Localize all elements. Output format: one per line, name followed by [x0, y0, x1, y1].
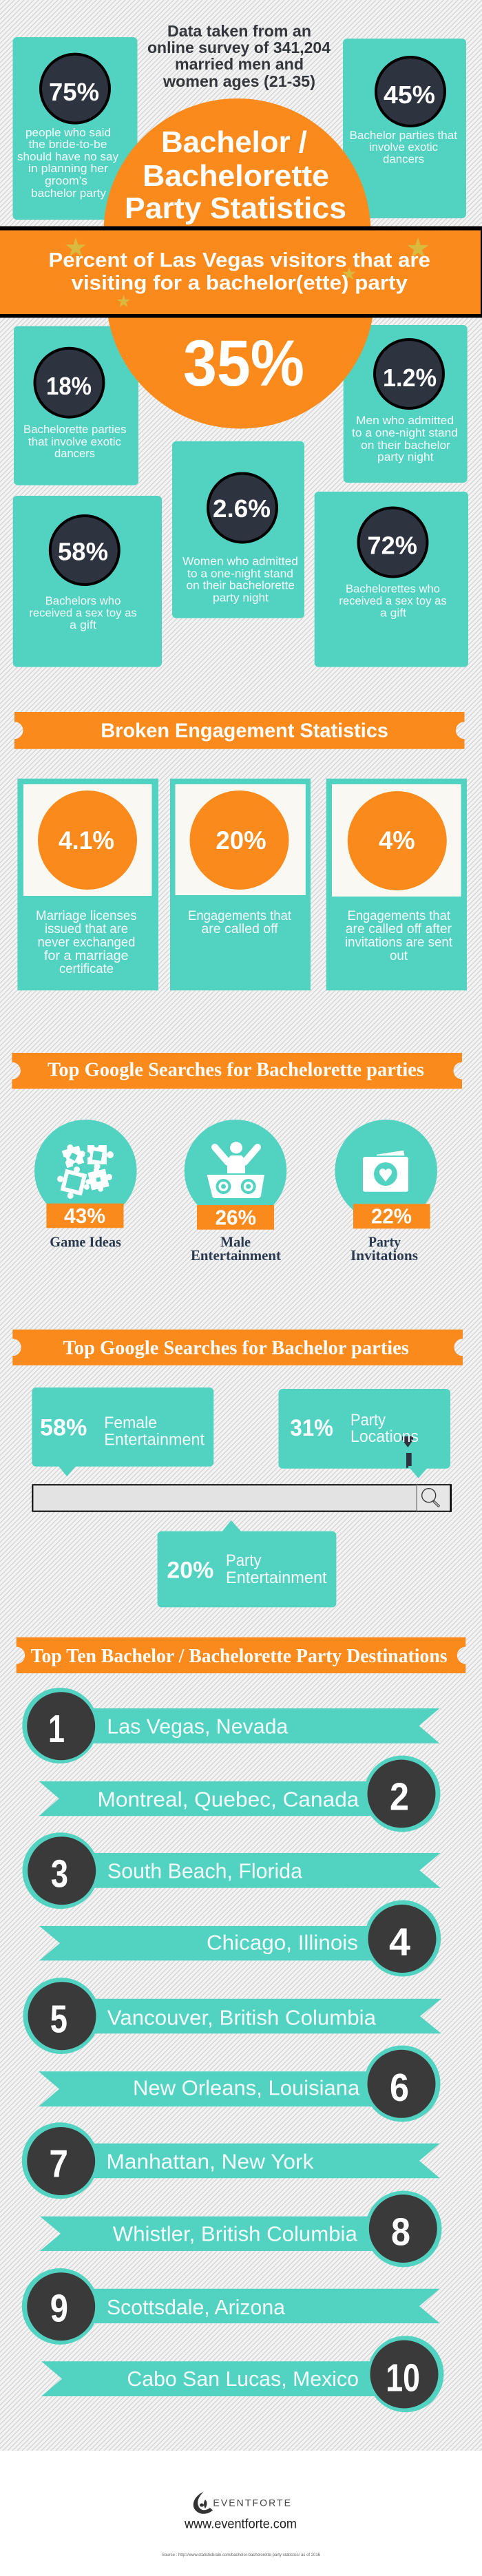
callout: party locations — [278, 1389, 450, 1478]
heading: bachelor searches: Top Google Searches for Bachelor parties — [63, 1337, 409, 1359]
intro text: married men and — [175, 55, 304, 73]
icon: eventforte mark — [193, 2491, 213, 2514]
panel: 4.1% marriage licenses: for a marriage — [44, 949, 129, 963]
search stat: game ideas: Game Ideas — [50, 1234, 121, 1250]
star — [407, 237, 429, 258]
stat: 1.2%: to a one-night stand — [352, 427, 458, 439]
footer logo: EVENTFORTE — [213, 2497, 291, 2508]
panel: 72% stat card: received a sex toy as — [339, 595, 447, 607]
panel: 4% called off after invitations — [326, 779, 467, 990]
heading: top ten destinations: Top Ten Bachelor / Bachelorette Party Destinations — [31, 1645, 448, 1667]
ribbon 7: Manhattan — [22, 2122, 440, 2199]
panel: 2.6% stat card: to a one-night stand — [187, 568, 293, 580]
panel: 58% stat card — [13, 496, 162, 667]
panel: 2.6% stat card: Women who admitted — [182, 556, 298, 568]
callout: party entertainment: Party — [226, 1551, 262, 1570]
panel: 20% engagements called off: are called off — [201, 922, 278, 936]
panel: 58% stat card: a gift — [70, 619, 96, 631]
panel: 20% engagements called off: 20% — [216, 826, 266, 855]
panel: 4% called off after invitations: invitations are sent — [345, 936, 453, 950]
ribbon 2: Montreal: Montreal, Quebec, Canada — [98, 1787, 359, 1811]
panel: 72% stat card — [315, 492, 468, 667]
search stat: male entertainment: 26% — [215, 1206, 256, 1229]
heading: bachelorette searches: Top Google Searches for Bachelorette parties — [48, 1058, 424, 1080]
panel: 4.1% marriage licenses: Marriage licenses — [36, 909, 137, 923]
panel: 20% engagements called off — [170, 779, 311, 990]
ribbon 7: Manhattan: 7 — [49, 2142, 68, 2186]
ribbon 1: Las Vegas: Las Vegas, Nevada — [107, 1714, 289, 1738]
star — [342, 267, 356, 280]
search stat: male entertainment: Male — [220, 1234, 251, 1250]
banner text: visiting for a bachelor(ette) party — [72, 272, 408, 295]
panel: 2.6% stat card — [172, 441, 304, 618]
stat: 1.2%: party night — [377, 451, 434, 463]
heading: broken engagement statistics: Broken Engagement Statistics — [101, 720, 388, 742]
panel: 4% called off after invitations: 4% — [379, 826, 415, 855]
panel: 2.6% stat card: 2.6% — [213, 494, 271, 523]
title — [125, 125, 346, 225]
search stat: party invitations — [335, 1120, 437, 1264]
stat circle 45% — [376, 57, 445, 126]
panel: 45% stat card — [343, 39, 466, 218]
ribbon 9: Scottsdale: 9 — [50, 2287, 68, 2330]
big orange circle: 35 percent — [106, 160, 375, 428]
stat: 18%: that involve exotic — [28, 436, 121, 448]
ribbon 10: Cabo San Lucas — [41, 2336, 443, 2412]
panel: 4% called off after invitations: out — [390, 949, 408, 963]
icon: puzzle pieces — [53, 1141, 115, 1203]
callout: party entertainment: Entertainment — [226, 1569, 327, 1587]
ribbon 6: New Orleans — [39, 2045, 441, 2122]
banner text: Percent of Las Vegas visitors that are — [48, 249, 430, 271]
text: 45% stat: involve exotic — [369, 141, 438, 154]
search stat: male entertainment — [185, 1120, 286, 1264]
heading: bachelor searches — [12, 1330, 463, 1365]
heading: bachelorette searches — [12, 1053, 462, 1089]
search stat: party invitations: Invitations — [350, 1247, 418, 1264]
ribbon 9: Scottsdale: Scottsdale, Arizona — [107, 2295, 286, 2319]
callout: party locations: Party — [350, 1411, 386, 1430]
callout: female entertainment — [32, 1388, 213, 1476]
banner: percent of Las Vegas visitors — [0, 226, 482, 318]
panel: 4% called off after invitations: Engagements that — [347, 909, 451, 923]
panel: 4.1% marriage licenses: never exchanged — [37, 936, 135, 950]
panel: 4% called off after invitations: are called off after — [346, 922, 452, 936]
text: 45% stat: Bachelor parties that — [350, 129, 457, 142]
ribbon 5: Vancouver: 5 — [50, 1998, 67, 2041]
star — [65, 237, 86, 257]
ribbon 8: Whistler — [40, 2191, 442, 2267]
icon: map marker — [402, 1436, 413, 1468]
ribbon 4: Chicago: Chicago, Illinois — [207, 1931, 358, 1955]
search stat: game ideas: 43% — [64, 1204, 105, 1228]
ribbon 1: Las Vegas: 1 — [48, 1707, 65, 1750]
intro text: Data taken from an — [167, 22, 311, 40]
panel: 58% stat card: Bachelors who — [45, 595, 120, 607]
callout: female entertainment: Female — [104, 1414, 157, 1432]
panel: 2.6% stat card: party night — [213, 592, 269, 605]
heading: top ten destinations — [17, 1637, 465, 1673]
callout: female entertainment: Entertainment — [104, 1431, 205, 1449]
heading: broken engagement statistics — [14, 712, 464, 749]
callout: party entertainment — [158, 1520, 336, 1607]
ribbon 3: South Beach: South Beach, Florida — [107, 1859, 303, 1883]
ribbon 4: Chicago: 4 — [389, 1920, 411, 1963]
ribbon 3: South Beach — [22, 1832, 441, 1909]
panel: 1.2% stat card — [344, 325, 468, 483]
icon: man in speaker box — [207, 1142, 264, 1198]
stat: 1.2%: on their bachelor — [361, 439, 451, 452]
ribbon 2: Montreal: 2 — [390, 1774, 409, 1818]
source line: Source : http://www.statisticbrain.com/bachelor-bachelorette-party-statistics/ as of 2016 — [162, 2553, 320, 2557]
ribbon 5: Vancouver — [23, 1978, 441, 2054]
stat: 18%: dancers — [54, 448, 95, 460]
title: Bachelor / — [161, 125, 307, 159]
panel: 4.1% marriage licenses — [17, 779, 158, 990]
website address: www.eventforte.com — [184, 2517, 297, 2532]
text: 75% stat: bachelor party — [31, 187, 107, 200]
ribbon 9: Scottsdale — [22, 2268, 440, 2345]
ribbon 2: Montreal — [39, 1756, 440, 1832]
text: 75% stat: 75% — [49, 78, 99, 106]
text: 75% stat — [17, 78, 119, 200]
ribbon 10: Cabo San Lucas: Cabo San Lucas, Mexico — [127, 2367, 359, 2391]
text: 45% stat: dancers — [383, 153, 424, 165]
panel: 18% stat card — [14, 326, 138, 485]
stat value 45%: 45% — [384, 81, 435, 109]
text: 75% stat: groom’s — [45, 175, 87, 187]
panel: 72% stat card: Bachelorettes who — [346, 583, 440, 596]
banner text — [48, 249, 430, 295]
intro text — [147, 22, 331, 90]
panel: 2.6% stat card: on their bachelorette — [186, 580, 295, 592]
panel: 4.1% marriage licenses: certificate — [59, 962, 114, 976]
stat circle 75% — [41, 54, 109, 123]
ribbon 10: Cabo San Lucas: 10 — [386, 2356, 420, 2399]
ribbon 5: Vancouver: Vancouver, British Columbia — [107, 2006, 377, 2030]
panel: 20% engagements called off: Engagements that — [188, 909, 292, 923]
text: 75% stat: the bride-to-be — [29, 138, 107, 151]
big orange circle: title — [103, 98, 370, 366]
search stat: male entertainment: Entertainment — [191, 1247, 281, 1264]
stat: 18% — [23, 348, 127, 460]
icon: magnifying glass — [422, 1489, 439, 1507]
icon: invitation card — [363, 1151, 408, 1192]
panel: 4.1% marriage licenses: 4.1% — [59, 826, 114, 855]
star — [117, 295, 130, 307]
search stat: party invitations: Party — [368, 1234, 401, 1250]
ribbon 3: South Beach: 3 — [51, 1852, 68, 1896]
intro text: online survey of 341,204 — [147, 39, 331, 56]
stat: 1.2% — [352, 339, 458, 463]
text: 75% stat: should have no say — [17, 151, 119, 163]
stat: 18%: Bachelorette parties — [23, 423, 127, 436]
text: 75% stat: people who said — [25, 127, 111, 139]
intro text: women ages (21-35) — [163, 72, 315, 90]
footer logo — [193, 2491, 291, 2514]
stat: 1.2%: Men who admitted — [356, 415, 454, 427]
panel: 75% stat card — [12, 37, 138, 220]
ribbon 8: Whistler: 8 — [391, 2210, 410, 2254]
title: Party Statistics — [125, 191, 346, 225]
callout: party entertainment: 20% — [167, 1558, 213, 1584]
ribbon 7: Manhattan: Manhattan, New York — [106, 2149, 314, 2173]
panel: 4.1% marriage licenses: issued that are — [45, 922, 128, 936]
ribbon 6: New Orleans: 6 — [390, 2066, 409, 2109]
stat: 1.2%: 1.2% — [383, 364, 437, 392]
search bar — [32, 1484, 452, 1512]
ribbon 1: Las Vegas — [22, 1688, 439, 1763]
ribbon 6: New Orleans: New Orleans, Louisiana — [133, 2075, 360, 2099]
panel: 58% stat card: 58% — [58, 538, 108, 566]
callout: party locations: Locations — [350, 1427, 419, 1446]
stat: 18%: 18% — [46, 372, 92, 400]
panel: 58% stat card: received a sex toy as — [29, 607, 137, 620]
search stat: game ideas — [34, 1120, 137, 1250]
title: Bachelorette — [143, 159, 329, 193]
search stat: party invitations: 22% — [371, 1205, 412, 1228]
text: 75% stat: in planning her — [28, 163, 109, 175]
panel: 72% stat card: a gift — [380, 607, 406, 620]
text: 45% stat — [350, 129, 457, 165]
stat value: 35%: 35% — [183, 327, 304, 400]
callout: party locations: 31% — [290, 1415, 333, 1441]
ribbon 4: Chicago — [39, 1900, 441, 1976]
panel: 72% stat card: 72% — [368, 532, 417, 560]
ribbon 8: Whistler: Whistler, British Columbia — [113, 2221, 358, 2245]
callout: female entertainment: 58% — [40, 1414, 87, 1441]
